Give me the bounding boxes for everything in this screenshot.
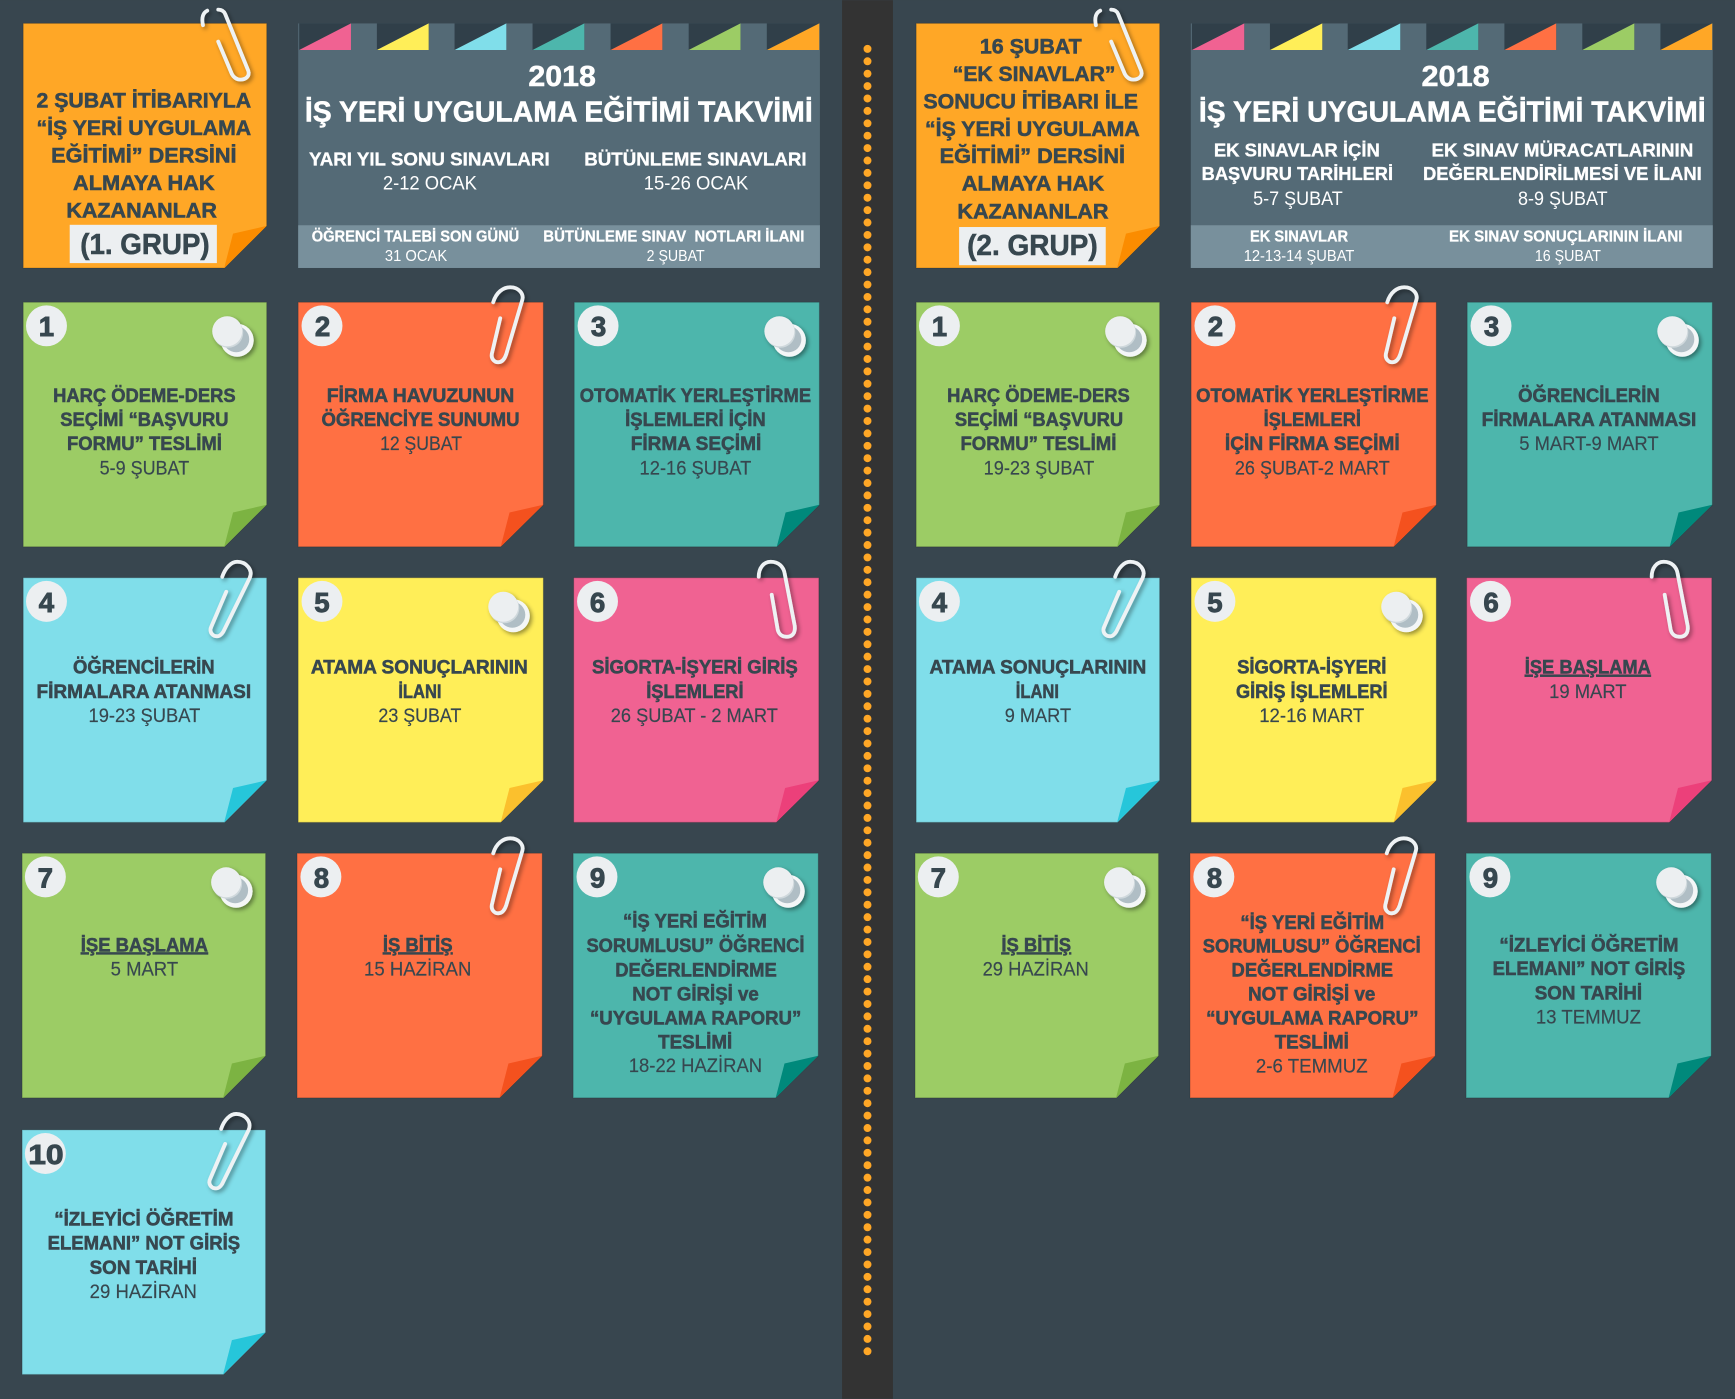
note: group 2 step 7	[915, 853, 1159, 1098]
icon: paperclip	[1386, 287, 1417, 362]
icon: paperclip	[1652, 562, 1688, 637]
step text: FORMU” TESLİMİ	[67, 432, 222, 455]
icon: paperclip	[1103, 562, 1144, 636]
note: group 1 step 6: 6	[590, 587, 605, 618]
step text: ATAMA SONUÇLARININ	[929, 657, 1146, 679]
group 1 eligibility text: ALMAYA HAK	[73, 172, 215, 195]
icon: paperclip	[759, 562, 795, 637]
step text: 13 TEMMUZ	[1536, 1006, 1641, 1028]
step text: 5 MART-9 MART	[1519, 433, 1659, 455]
step text	[983, 933, 1089, 981]
header title: İŞ YERİ UYGULAMA EĞİTİMİ TAKVİMİ	[1199, 95, 1706, 129]
step text: ÖĞRENCİYE SUNUMU	[321, 407, 520, 431]
note: group 1 step 1	[23, 302, 267, 547]
header footer band: ÖĞRENCİ TALEBİ SON GÜNÜ	[312, 227, 519, 245]
header footer band	[298, 225, 820, 268]
extra exam application dates: 8-9 ŞUBAT	[1518, 188, 1608, 210]
note: group 1 step 1: 1	[39, 311, 54, 342]
step text: FİRMALARA ATANMASI	[37, 680, 251, 703]
step text: NOT GİRİŞİ ve	[632, 982, 759, 1005]
step text	[1482, 383, 1696, 455]
note: group 2 step 5: 5	[1207, 587, 1223, 618]
icon: paperclip	[492, 838, 523, 913]
step text	[311, 657, 528, 727]
header footer band: 12-13-14 ŞUBAT	[1244, 248, 1355, 265]
icon: paperclip	[202, 10, 249, 80]
step text	[1493, 932, 1685, 1028]
note: group 1 step 4	[23, 562, 267, 822]
header footer band: 31 OCAK	[385, 248, 448, 265]
step text: SİGORTA-İŞYERİ	[1237, 656, 1386, 679]
note: group 2 step 8	[1190, 838, 1435, 1098]
note: group 2 step 1: 1	[932, 311, 947, 342]
step text: 23 ŞUBAT	[378, 705, 462, 727]
note: group 2 step 4	[916, 562, 1160, 822]
header title	[305, 61, 813, 129]
step text: FORMU” TESLİMİ	[960, 432, 1116, 455]
icon: paperclip	[209, 1114, 250, 1188]
step text: SORUMLUSU” ÖĞRENCİ	[1203, 934, 1421, 958]
step text	[81, 933, 208, 981]
header title: 2018	[1422, 61, 1490, 93]
note: group 1 step 3: 3	[591, 311, 606, 342]
icon: paperclip	[210, 562, 251, 636]
extra exam application dates: EK SINAVLAR İÇİN	[1214, 139, 1380, 160]
step text: “UYGULAMA RAPORU”	[590, 1007, 801, 1029]
header footer band: BÜTÜNLEME SINAV NOTLARI İLANI	[543, 228, 804, 245]
step text: 2-6 TEMMUZ	[1256, 1056, 1368, 1078]
center divider band with dotted line	[842, 0, 893, 1399]
step text	[364, 933, 471, 981]
group 2 eligibility text: “EK SINAVLAR”	[953, 63, 1115, 86]
group 2 eligibility text: EĞİTİMİ” DERSİNİ	[940, 144, 1125, 168]
step text: TESLİMİ	[658, 1030, 732, 1053]
note: group 1 step 10: 10	[28, 1139, 64, 1170]
header title	[1199, 61, 1706, 129]
step text	[53, 384, 236, 479]
note: group 2 step 2	[1191, 287, 1436, 547]
exam dates: YARI YIL SONU SINAVLARI	[309, 148, 550, 169]
group 1 eligibility text: “İŞ YERİ UYGULAMA	[37, 117, 251, 140]
note: group 1 step 7: 7	[38, 862, 53, 893]
step text: 5-9 ŞUBAT	[100, 457, 189, 479]
icon: paperclip	[1385, 838, 1416, 913]
step text: “İŞ YERİ EĞİTİM	[623, 909, 767, 933]
step text	[1196, 384, 1429, 479]
step text: 19-23 ŞUBAT	[984, 457, 1094, 479]
group 2 eligibility text: 16 ŞUBAT	[980, 35, 1082, 58]
note: group 1 step 2: 2	[315, 311, 330, 342]
step text: 15 HAZİRAN	[364, 958, 471, 981]
note: group 1 step 7	[22, 853, 266, 1098]
header footer band: 16 ŞUBAT	[1535, 248, 1601, 265]
step text: 29 HAZİRAN	[983, 958, 1089, 981]
extra exam application dates: 5-7 ŞUBAT	[1253, 188, 1343, 210]
step text: OTOMATİK YERLEŞTİRME	[1196, 384, 1429, 407]
icon: push pin	[212, 316, 254, 357]
exam dates: BÜTÜNLEME SINAVLARI	[584, 148, 807, 169]
note: group 1 step 9: 9	[590, 862, 605, 893]
note: group 2 step 9: 9	[1483, 862, 1498, 893]
step text	[586, 909, 804, 1077]
group 2 eligibility text: KAZANANLAR	[957, 200, 1108, 223]
note: group 1 step 5	[298, 578, 543, 822]
header title: 2018	[528, 61, 596, 93]
step text: İŞLEMLERİ	[646, 680, 744, 703]
step text: ELEMANI” NOT GİRİŞ	[1493, 957, 1685, 980]
step text: SORUMLUSU” ÖĞRENCİ	[586, 933, 804, 957]
note: group 2 step 3: 3	[1484, 311, 1499, 342]
icon: push pin	[211, 867, 253, 908]
icon: push pin	[764, 316, 806, 357]
extra exam application dates: BAŞVURU TARİHLERİ	[1202, 163, 1393, 184]
note: group 1 step 8: 8	[314, 862, 329, 893]
extra exam application dates: DEĞERLENDİRİLMESİ VE İLANI	[1423, 163, 1702, 184]
step text: 12-16 MART	[1259, 705, 1364, 727]
step text: 12-16 ŞUBAT	[640, 457, 751, 479]
step text: ELEMANI” NOT GİRİŞ	[48, 1232, 240, 1255]
group 1 eligibility text: 2 ŞUBAT İTİBARIYLA	[37, 90, 251, 113]
exam dates: 15-26 OCAK	[644, 173, 748, 195]
step text: 12 ŞUBAT	[380, 433, 462, 455]
icon: push pin	[763, 867, 805, 908]
step text: SON TARİHİ	[1535, 982, 1642, 1005]
panel: group 1 intro note	[23, 10, 267, 268]
note: group 2 step 5	[1191, 578, 1436, 822]
step text: 29 HAZİRAN	[90, 1280, 197, 1303]
group 1 eligibility text: KAZANANLAR	[66, 200, 217, 223]
header title: İŞ YERİ UYGULAMA EĞİTİMİ TAKVİMİ	[305, 95, 813, 129]
extra exam application dates	[1202, 139, 1702, 210]
step text: OTOMATİK YERLEŞTİRME	[580, 384, 811, 407]
note: group 1 step 10	[22, 1114, 266, 1374]
step text: SİGORTA-İŞYERİ GİRİŞ	[592, 656, 798, 679]
step text: İÇİN FİRMA SEÇİMİ	[1225, 432, 1400, 455]
note: group 2 step 8: 8	[1207, 862, 1222, 893]
header footer band: EK SINAVLAR	[1250, 228, 1348, 245]
note: group 2 step 7: 7	[931, 862, 946, 893]
step text: 26 ŞUBAT-2 MART	[1235, 457, 1390, 479]
exam dates	[309, 148, 807, 195]
icon: push pin	[1381, 592, 1423, 632]
step text: “İŞ YERİ EĞİTİM	[1240, 910, 1384, 934]
step text: İŞLEMLERİ İÇİN	[625, 408, 766, 431]
step text: SEÇİMİ “BAŞVURU	[60, 408, 228, 431]
note: group 2 step 1	[916, 302, 1160, 547]
step text	[580, 384, 811, 479]
step text: 18-22 HAZİRAN	[629, 1054, 762, 1077]
exam dates: 2-12 OCAK	[383, 173, 477, 195]
icon: push pin	[1657, 316, 1699, 357]
header footer band	[1191, 225, 1713, 268]
note: group 1 step 5: 5	[314, 587, 330, 618]
step text	[947, 384, 1130, 479]
step text: İŞ BİTİŞ	[383, 933, 453, 956]
step text: ÖĞRENCİLERİN	[73, 655, 215, 679]
step text: GİRİŞ İŞLEMLERİ	[1236, 680, 1388, 703]
note: group 1 step 2	[298, 287, 543, 547]
step text: HARÇ ÖDEME-DERS	[53, 384, 236, 407]
note: group 1 step 9	[573, 853, 818, 1098]
group 2 eligibility text: “İŞ YERİ UYGULAMA	[925, 118, 1140, 141]
group 2 eligibility text: SONUCU İTİBARI İLE	[923, 90, 1138, 113]
icon: push pin	[1105, 316, 1147, 357]
icon: push pin	[1104, 867, 1146, 908]
step text	[37, 655, 251, 727]
icon: push pin	[1656, 867, 1698, 908]
extra exam application dates: EK SINAV MÜRACATLARININ	[1431, 139, 1693, 160]
step text	[321, 384, 520, 455]
step text	[48, 1207, 240, 1303]
group 1 eligibility text: EĞİTİMİ” DERSİNİ	[51, 144, 237, 168]
icon: paperclip	[492, 287, 523, 362]
step text: 9 MART	[1005, 705, 1071, 727]
icon: paperclip	[1095, 10, 1142, 80]
step text: İŞ BİTİŞ	[1001, 933, 1071, 956]
step text	[1236, 656, 1388, 727]
group 1 eligibility text	[37, 90, 251, 223]
step text: 26 ŞUBAT - 2 MART	[611, 705, 778, 727]
step text: İŞE BAŞLAMA	[1525, 656, 1651, 679]
step text: İŞE BAŞLAMA	[81, 933, 208, 956]
step text	[592, 656, 798, 727]
step text: “İZLEYİCİ ÖĞRETİM	[1499, 932, 1679, 956]
step text: FİRMA SEÇİMİ	[631, 432, 761, 455]
group 2 eligibility text: ALMAYA HAK	[962, 173, 1104, 196]
note: group 2 step 2: 2	[1208, 311, 1223, 342]
colored calendar tabs	[1192, 23, 1712, 50]
header footer band: 2 ŞUBAT	[647, 248, 705, 265]
note: group 2 step 3	[1467, 302, 1712, 547]
note: group 1 step 3	[574, 302, 819, 547]
step text: 19 MART	[1549, 681, 1627, 703]
step text	[1203, 910, 1421, 1078]
step text: “UYGULAMA RAPORU”	[1206, 1008, 1419, 1030]
step text: DEĞERLENDİRME	[615, 957, 777, 981]
icon: push pin	[488, 592, 530, 632]
step text: SEÇİMİ “BAŞVURU	[955, 408, 1123, 431]
note: group 2 step 6	[1467, 562, 1712, 822]
note: group 2 step 6: 6	[1483, 587, 1499, 618]
header footer band: EK SINAV SONUÇLARININ İLANI	[1449, 228, 1682, 245]
step text: 19-23 ŞUBAT	[89, 705, 200, 727]
step text: NOT GİRİŞİ ve	[1248, 983, 1376, 1006]
step text: “İZLEYİCİ ÖĞRETİM	[54, 1207, 233, 1231]
note: group 2 step 4: 4	[932, 587, 948, 618]
group 1 label: (1. GRUP)	[80, 229, 210, 261]
colored calendar tabs	[299, 23, 819, 50]
step text: TESLİMİ	[1275, 1030, 1349, 1053]
step text: HARÇ ÖDEME-DERS	[947, 384, 1130, 407]
step text: 5 MART	[111, 959, 178, 981]
panel: group 2 intro note	[916, 10, 1160, 268]
note: group 2 step 9	[1466, 853, 1711, 1098]
note: group 1 step 4: 4	[39, 587, 55, 618]
step text	[1525, 656, 1651, 703]
step text: DEĞERLENDİRME	[1232, 957, 1393, 981]
step text: İLANI	[398, 680, 441, 703]
panel: group 2 calendar header	[1191, 23, 1713, 268]
step text: FİRMALARA ATANMASI	[1482, 408, 1696, 431]
step text: SON TARİHİ	[90, 1256, 197, 1279]
step text: İLANI	[1016, 680, 1059, 703]
group 2 label: (2. GRUP)	[967, 230, 1098, 262]
group 2 eligibility text	[923, 35, 1140, 223]
step text: İŞLEMLERİ	[1264, 408, 1361, 431]
step text: FİRMA HAVUZUNUN	[327, 384, 514, 407]
note: group 1 step 8	[297, 838, 542, 1098]
step text	[929, 657, 1146, 727]
note: group 1 step 6	[574, 562, 819, 822]
step text: ÖĞRENCİLERİN	[1518, 383, 1660, 407]
step text: ATAMA SONUÇLARININ	[311, 657, 528, 679]
panel: group 1 calendar header	[298, 23, 820, 268]
